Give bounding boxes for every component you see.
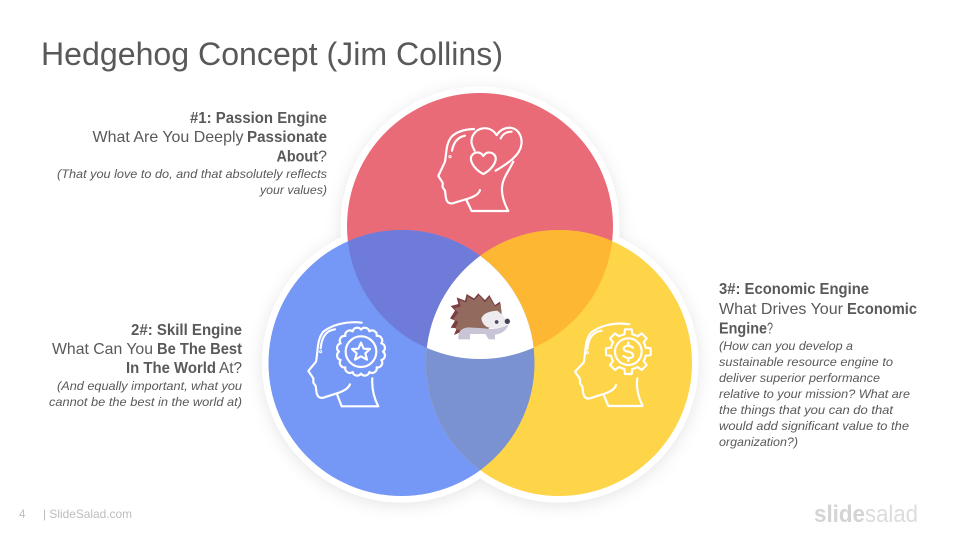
text block: economic engine: Economic — [847, 301, 917, 318]
text block: economic engine: What Drives Your — [719, 301, 844, 318]
text block: economic engine: would add significant value to the — [719, 419, 909, 433]
overlap: passion and economic — [426, 230, 612, 348]
text block: economic engine: organization?) — [719, 435, 798, 449]
text block: economic engine: (How can you develop a — [719, 339, 853, 353]
icon: hedgehog — [450, 293, 510, 339]
text block: skill engine: (And equally important, what you — [57, 379, 242, 393]
text block: passion engine: (That you love to do, and that absolutely reflects — [57, 167, 327, 181]
text block: passion engine: Passionate — [247, 129, 327, 146]
text block: economic engine: Engine — [719, 320, 767, 338]
text block: passion engine: ? — [318, 148, 327, 166]
text block: skill engine — [49, 322, 243, 409]
text block: passion engine — [57, 110, 327, 197]
logo: slidesalad: slide — [814, 501, 865, 528]
text block: economic engine: deliver superior performance — [719, 371, 880, 385]
center white area — [426, 256, 534, 359]
overlap: passion and skill — [348, 230, 480, 348]
text block: economic engine: ? — [767, 320, 773, 338]
text block: economic engine: 3#: Economic Engine — [719, 281, 869, 298]
icon: head with hearts — [438, 128, 522, 211]
circle: passion — [347, 93, 613, 359]
text block: skill engine: In The World — [126, 360, 216, 377]
logo: slidesalad — [814, 501, 918, 528]
title: Hedgehog Concept (Jim Collins) — [41, 36, 503, 72]
icon: head with dollar gear — [575, 324, 651, 406]
text block: economic engine: sustainable resource engine to — [719, 355, 893, 369]
logo: slidesalad: salad — [865, 501, 918, 528]
footer: site name: | SlideSalad.com — [43, 507, 132, 521]
text block: skill engine: 2#: Skill Engine — [131, 322, 242, 339]
overlap: skill and economic — [426, 256, 534, 470]
text block: economic engine: relative to your mission? What are — [719, 387, 910, 401]
text block: economic engine: the things that you can do that — [719, 403, 894, 417]
venn diagram — [262, 86, 698, 502]
text block: passion engine: #1: Passion Engine — [190, 110, 327, 127]
text block: skill engine: Be The Best — [157, 341, 243, 358]
text block: skill engine: What Can You — [52, 341, 153, 358]
text block: economic engine — [719, 281, 917, 449]
text block: skill engine: cannot be the best in the world at) — [49, 395, 242, 409]
text block: skill engine: At? — [219, 360, 242, 377]
footer: page number: 4 — [19, 507, 26, 521]
circle: skill — [268, 230, 534, 496]
white circle rings — [262, 86, 698, 502]
icon: head with star badge — [308, 322, 385, 406]
text block: passion engine: What Are You Deeply — [92, 129, 244, 146]
circle: economic — [426, 230, 692, 496]
text block: passion engine: About — [276, 148, 319, 166]
text block: passion engine: your values) — [259, 183, 327, 197]
